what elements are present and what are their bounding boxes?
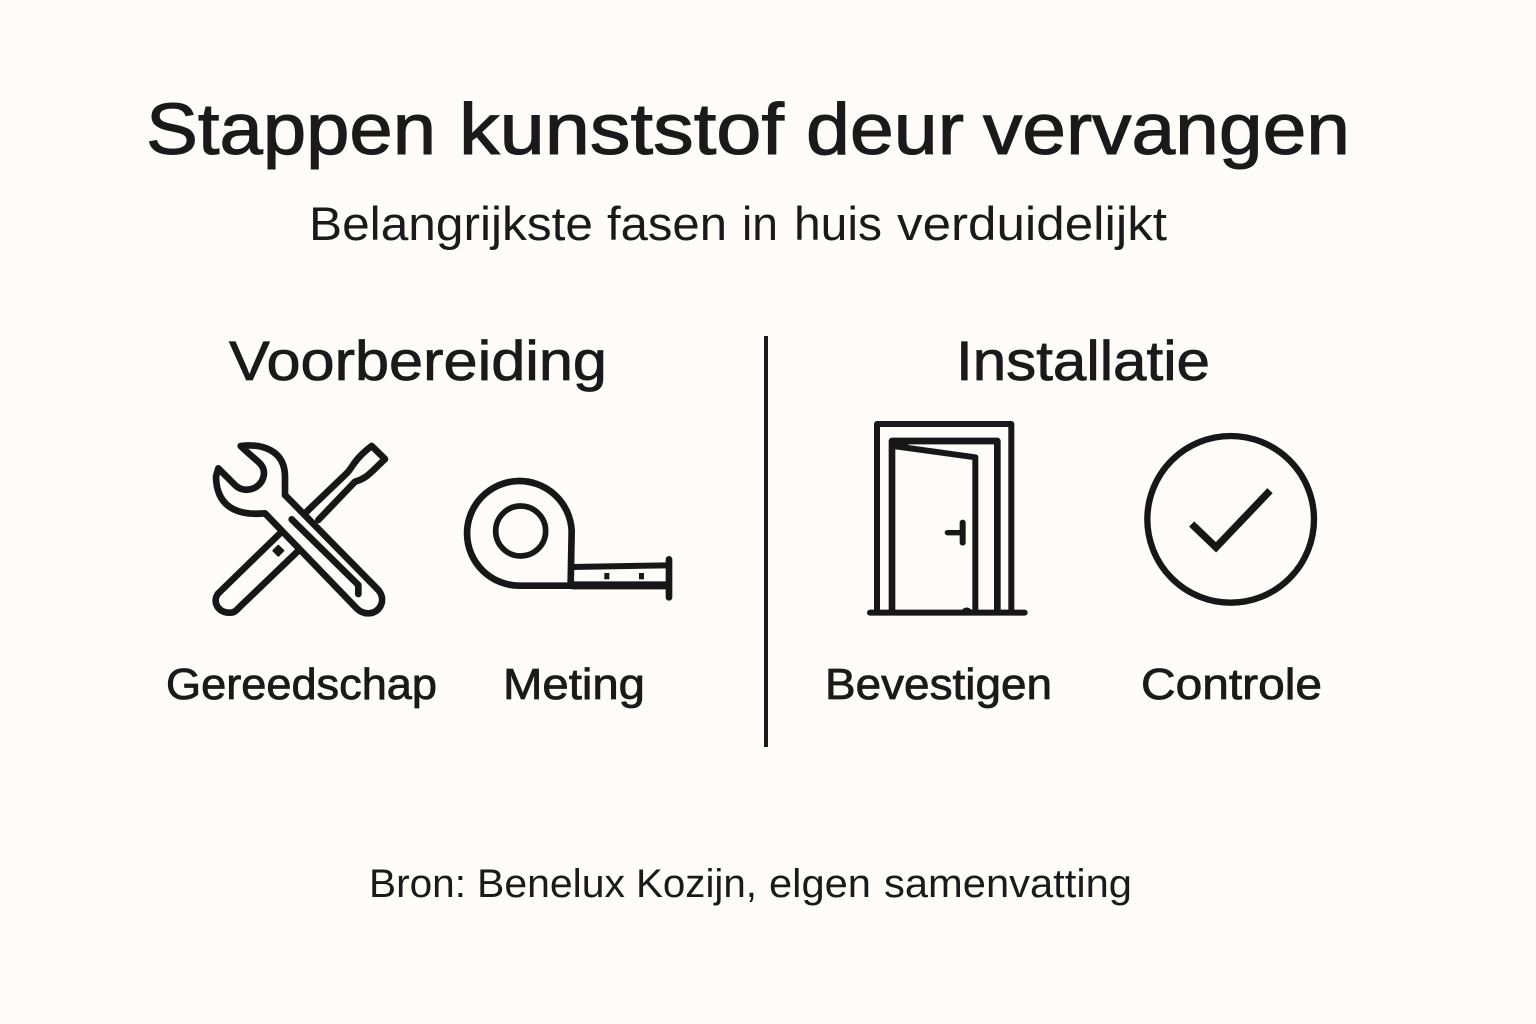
source note: Benelux (477, 862, 625, 906)
divider (764, 336, 768, 747)
icon: tape measure (467, 481, 669, 597)
title: kunststof (459, 90, 785, 170)
icon: wrench and screwdriver (216, 445, 385, 613)
label: Bevestigen: Bevestigen (825, 660, 1052, 709)
title: Stappen (146, 90, 436, 170)
source note: Kozijn, (636, 862, 757, 906)
title: vervangen (983, 90, 1350, 170)
source note (369, 862, 1132, 906)
panel: Installatie (825, 329, 1322, 709)
title (146, 90, 1350, 170)
heading: Voorbereiding: Voorbereiding (229, 329, 607, 392)
subtitle: Belangrijkste (309, 197, 593, 250)
heading: Installatie: Installatie (956, 329, 1210, 392)
subtitle: huis (794, 197, 882, 250)
panel: Voorbereiding (166, 329, 669, 709)
source note: samenvatting (884, 862, 1132, 906)
source note: Bron: (369, 862, 466, 906)
subtitle: fasen (607, 197, 727, 250)
subtitle: in (742, 197, 778, 250)
subtitle (309, 197, 1167, 250)
subtitle: verduidelijkt (897, 197, 1167, 250)
title: deur (806, 90, 964, 170)
label: Meting: Meting (503, 660, 645, 709)
source note: elgen (769, 862, 871, 906)
label: Controle: Controle (1141, 660, 1322, 709)
label: Gereedschap: Gereedschap (166, 660, 437, 709)
icon: door (870, 424, 1025, 613)
icon: check circle (1147, 436, 1314, 603)
